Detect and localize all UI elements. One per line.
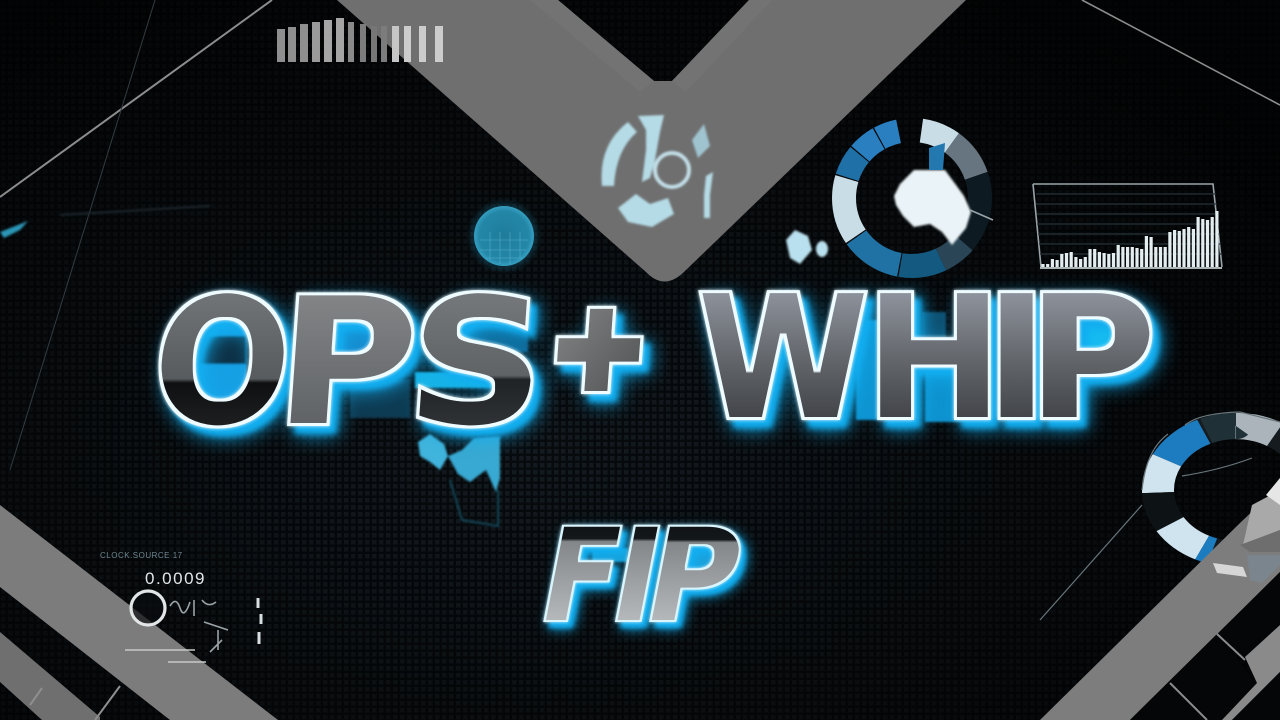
letter P: P [270,262,424,465]
readout ring [131,591,165,625]
ring chart right [1158,426,1280,554]
readout header: CLOCK.SOURCE 17 [100,551,183,560]
icon: donut centre blob [894,143,993,245]
letter F: F [529,501,635,650]
donut chart [844,130,980,266]
icon: faint left streaks [0,206,210,238]
letter S: S [401,262,553,465]
diagonal frame lines [0,0,1280,470]
blue map fragments below OPS [418,434,500,526]
icon: top level bars [277,18,443,62]
chevron panel [337,0,966,282]
letter I: I [985,260,1048,458]
ring detail lines [1040,412,1280,620]
letter P: P [634,502,754,651]
readout widget bottom left [100,551,261,652]
bar chart [1033,184,1222,268]
title: WHIP [697,259,1157,458]
readout value: 0.0009 [145,569,206,588]
bottom-left grey band [0,505,278,720]
title: FIP [529,501,754,651]
readout column [258,598,261,644]
faint horizontal scan line [10,497,420,499]
icon: blue sphere [470,202,538,270]
bottom-right grey band [1040,478,1280,720]
icon: grey globe [602,115,713,227]
letter I: I [600,501,674,650]
letter W: W [697,259,870,458]
letter P: P [1027,259,1157,457]
letter H: H [865,261,1003,458]
readout squiggles [170,600,228,652]
title: plus sign: + [546,280,652,414]
letter O: O [146,261,299,464]
title: OPS [146,261,553,465]
icon: small map fragments [786,230,828,264]
blue backing behind titles [195,312,1122,580]
